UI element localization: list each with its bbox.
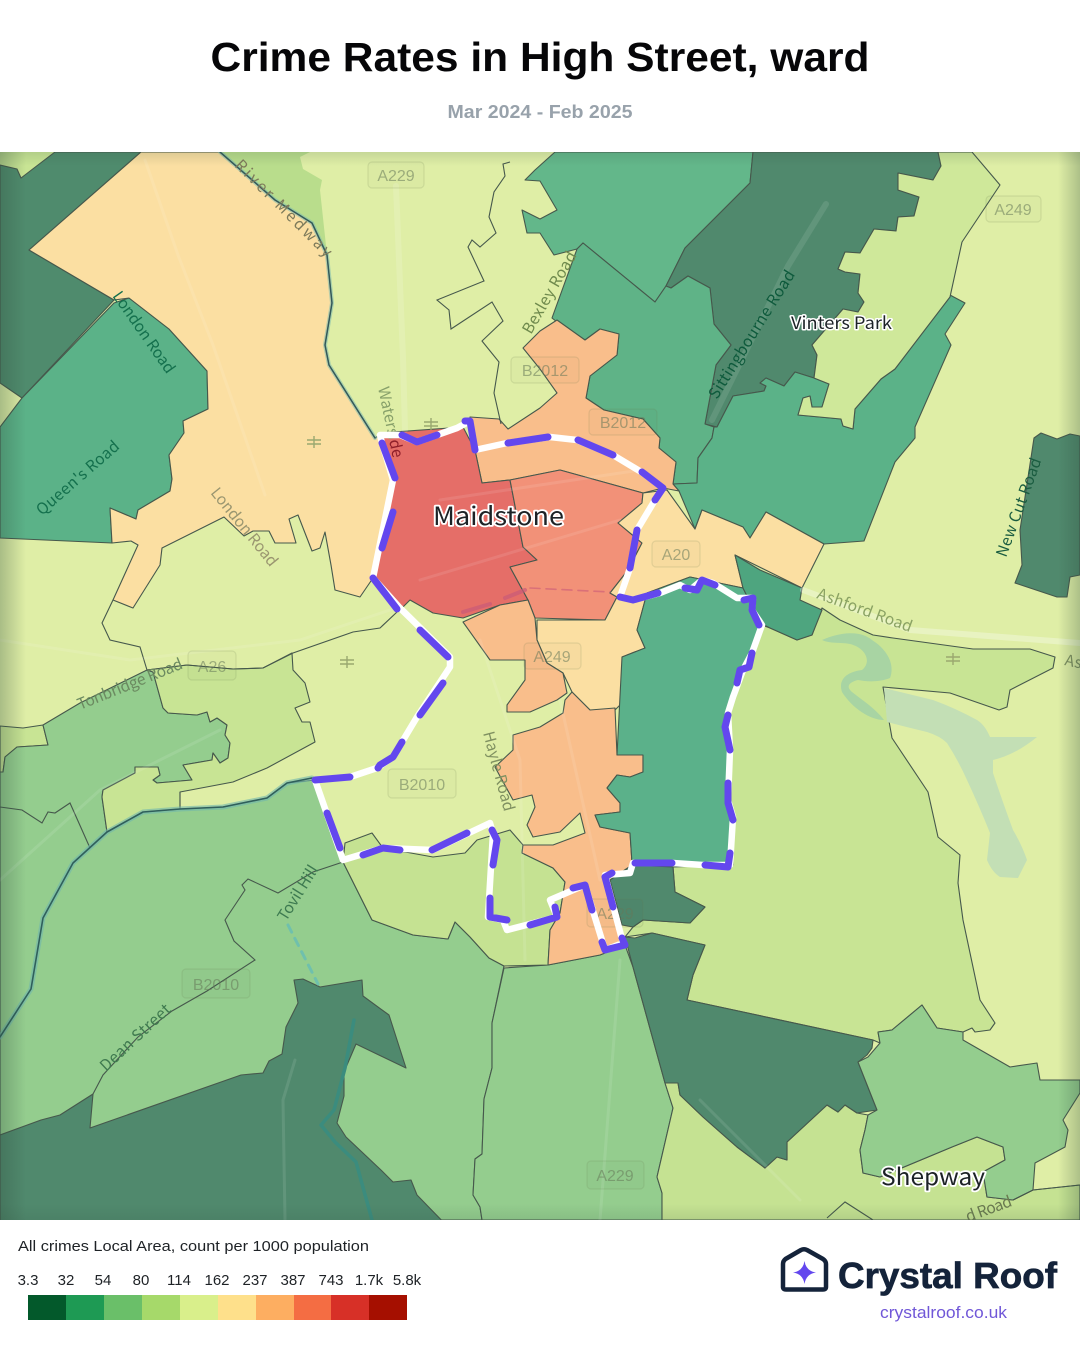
region: north orange <box>470 320 679 493</box>
legend colour bar <box>28 1295 407 1320</box>
choropleth regions <box>0 152 1080 1230</box>
wordmark: Crystal Roof <box>838 1255 1058 1296</box>
title: Crime Rates in High Street, ward <box>210 34 870 80</box>
legend <box>18 1238 422 1320</box>
road name labels <box>31 154 1080 1227</box>
shield: A229 south <box>587 1161 644 1189</box>
river Medway: north reach <box>220 152 375 438</box>
shield: B2010 south: B2010 <box>193 977 239 994</box>
region: south mid lime <box>343 830 565 966</box>
region: Maidstone centre red <box>373 427 537 618</box>
legend scale labels: 387 <box>280 1272 306 1289</box>
shield: B2012 west: B2012 <box>522 363 568 380</box>
shield: A249 <box>524 643 581 669</box>
region boundary lines <box>0 162 1080 1220</box>
region: east mid <box>625 608 1055 1043</box>
shield: B2010 south <box>182 969 250 998</box>
legend scale labels: 162 <box>204 1272 230 1289</box>
label: Road fragment: d Road <box>962 1190 1015 1227</box>
rivers <box>0 152 375 1220</box>
legend scale labels: 237 <box>242 1272 268 1289</box>
shield: B2010 centre <box>388 769 456 798</box>
legend scale labels: 5.8k <box>393 1272 422 1289</box>
region: east tan (A20) <box>537 490 824 710</box>
railway in town centre <box>463 588 610 612</box>
legend scale labels: 32 <box>58 1272 74 1289</box>
region: south-west light green <box>0 670 504 1220</box>
label: Tovil Hill: Tovil Hill <box>272 860 323 925</box>
shield: A20: A20 <box>662 547 690 564</box>
rail station symbols <box>307 418 960 668</box>
shield: A20 <box>652 541 700 567</box>
region: east dark <box>1015 433 1080 597</box>
shield: B2012 east: B2012 <box>600 415 646 432</box>
shield: B2012 west <box>511 357 579 383</box>
region: north-west corner lime <box>0 152 55 178</box>
place label: Maidstone: Maidstone <box>433 497 564 533</box>
shield: A26 <box>188 651 236 680</box>
icon: house with star <box>783 1249 826 1290</box>
label: London Road north: London Road <box>108 286 181 378</box>
legend scale labels: 1.7k <box>355 1272 384 1289</box>
legend scale labels: 114 <box>167 1272 191 1289</box>
ward outline: white <box>315 421 762 950</box>
label: River Medway: River Medway <box>230 154 338 261</box>
logo: Crystal Roof <box>783 1249 1058 1322</box>
region: east ward green <box>595 577 762 865</box>
region: south orange corridor <box>495 692 643 965</box>
legend scale labels: 80 <box>133 1272 149 1289</box>
stream: Loose <box>321 1020 372 1220</box>
region: riverside mid green <box>220 152 327 255</box>
region: A249 orange <box>463 600 567 712</box>
label: Dean Street: Dean Street <box>94 998 175 1076</box>
map <box>0 152 1080 1230</box>
edge vignette <box>0 152 1080 1220</box>
road network <box>0 160 1080 1220</box>
river Medway: south reach <box>0 778 312 1037</box>
shield: A249 north-east: A249 <box>994 202 1032 219</box>
region: far-west mid lime <box>0 725 48 772</box>
shield: A229 south: A229 <box>596 1168 634 1185</box>
legend scale labels: 743 <box>318 1272 344 1289</box>
region: south-east mid <box>657 1083 1080 1220</box>
shield: B2012 east <box>589 409 657 435</box>
shield: A249: A249 <box>533 649 571 666</box>
region: north-central green <box>552 243 731 484</box>
region: south dark <box>0 979 451 1230</box>
label: Queen's Road: Queen's Road <box>31 435 124 520</box>
legend scale labels: 3.3 <box>18 1272 38 1289</box>
lake: west <box>822 633 892 720</box>
region: dark pocket south of ward <box>610 865 705 927</box>
region: north dark <box>666 152 941 427</box>
label: New Cut Road: New Cut Road <box>990 454 1046 560</box>
region: north-east lime <box>798 152 1000 429</box>
label: Bexley Road: Bexley Road <box>516 247 581 338</box>
place label: Vinters Park: Vinters Park <box>791 309 893 334</box>
label: Hayle Road: Hayle Road <box>478 729 521 814</box>
region: south-east dark <box>625 933 877 1168</box>
website link: crystalroof.co.uk <box>880 1304 1008 1322</box>
place label: Shepway: Shepway <box>881 1158 985 1192</box>
road shield labels <box>182 162 1041 1189</box>
lake: main <box>884 688 1037 878</box>
label: Tonbridge Road: Tonbridge Road <box>74 652 186 715</box>
region: south centre <box>473 945 673 1220</box>
region: north-west dark <box>0 152 141 398</box>
region: south-east green <box>858 1005 1080 1200</box>
label: London Road south: London Road <box>206 482 284 571</box>
label: Sittingbourne Road: Sittingbourne Road <box>703 265 800 403</box>
shield: A229 north <box>368 162 424 188</box>
region: north-west tan <box>29 152 393 608</box>
region: Ashford Road green <box>735 555 822 640</box>
shield: B2010 centre: B2010 <box>399 777 445 794</box>
ward boundary: High Street <box>315 421 762 950</box>
shield: A229 north: A229 <box>377 168 415 185</box>
ward outline: purple dashes <box>315 421 759 950</box>
legend title: All crimes Local Area, count per 1000 population <box>18 1238 369 1255</box>
region: Queen's Road green <box>0 298 208 543</box>
subtitle: date range: Mar 2024 - Feb 2025 <box>448 102 632 122</box>
shield: A229 centre <box>587 899 643 927</box>
label: Waterside: Waterside <box>373 384 410 459</box>
region: north-east green <box>673 295 965 544</box>
shield: A26: A26 <box>198 659 226 676</box>
region: north green <box>522 152 753 302</box>
shield: A229 centre: A229 <box>596 906 634 923</box>
region: Maidstone salmon <box>510 470 643 620</box>
region: west mid lime <box>102 653 315 832</box>
label: Ashford Road: Ashford Road <box>814 582 916 637</box>
legend scale labels: 54 <box>95 1272 111 1289</box>
legend scale labels <box>18 1272 422 1289</box>
shield: A249 north-east <box>986 196 1041 222</box>
